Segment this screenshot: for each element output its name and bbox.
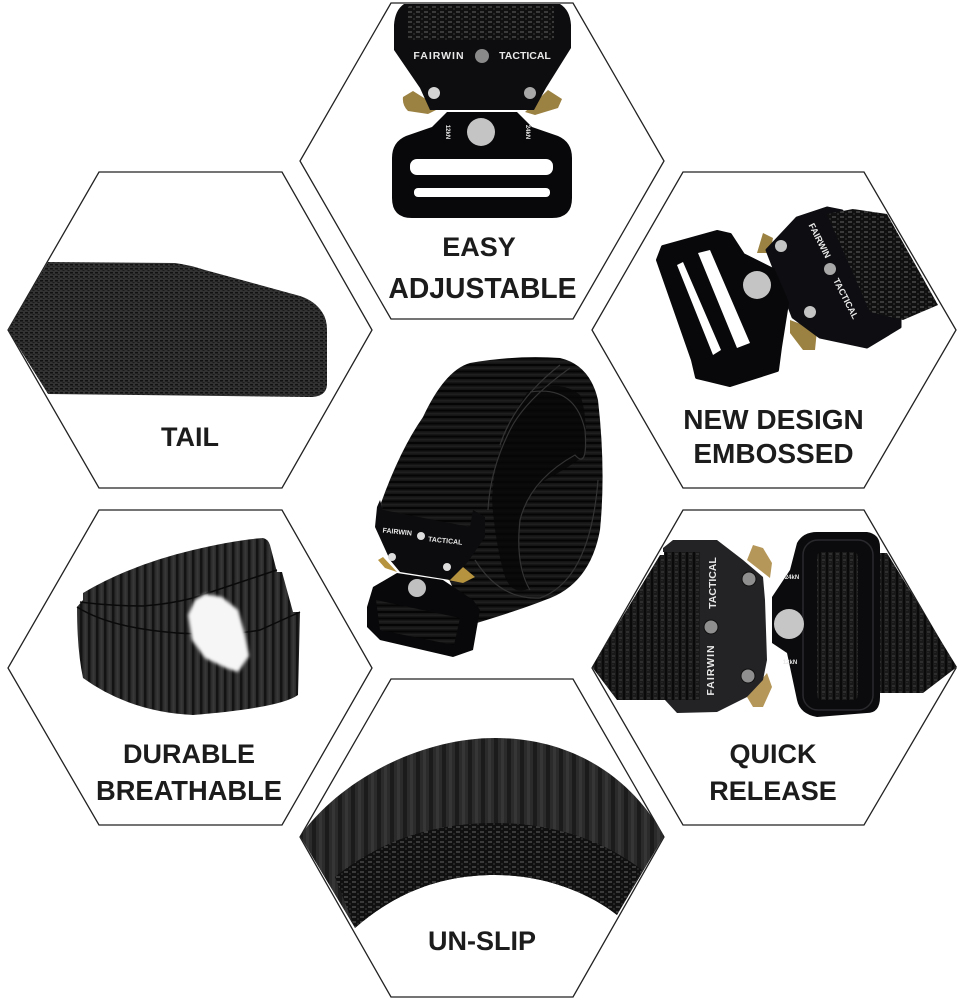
heading: un-slip: UN-SLIP	[428, 926, 536, 956]
icon: horizontal buckle: TACTICAL	[707, 557, 719, 609]
icon: center buckle: TACTICAL	[428, 536, 463, 547]
icon: belt tail	[8, 262, 327, 397]
center belt image	[367, 357, 603, 657]
icon: center buckle: FAIRWIN	[382, 527, 412, 538]
belt loop	[381, 357, 603, 625]
heading: durable breathable: DURABLE	[123, 739, 255, 769]
icon: horizontal buckle: 12kN	[783, 660, 797, 666]
heading: new design embossed: NEW DESIGN	[683, 404, 864, 435]
heading: easy adjustable: EASY	[442, 232, 516, 262]
panel: quick release	[592, 510, 957, 825]
icon: horizontal buckle	[592, 532, 957, 717]
panel: un-slip	[300, 679, 664, 997]
panel: easy adjustable	[300, 3, 664, 319]
panel: durable breathable: BREATHABLE	[96, 775, 282, 806]
panel: tail	[8, 172, 372, 488]
icon: top buckle: 24kN	[524, 125, 530, 139]
icon: top buckle: TACTICAL	[499, 50, 551, 62]
icon: rolled belt with feather	[77, 538, 300, 715]
icon: horizontal buckle: FAIRWIN	[705, 644, 717, 696]
icon: white feather	[188, 594, 249, 672]
icon: angled buckle: FAIRWIN	[807, 222, 833, 260]
icon: top buckle	[392, 4, 572, 218]
icon: horizontal buckle: 24kN	[785, 575, 799, 581]
icon: center buckle	[367, 500, 485, 657]
panel: quick release: RELEASE	[709, 776, 837, 806]
icon: angled buckle	[658, 208, 938, 385]
panel: durable breathable	[8, 510, 372, 825]
panel: easy adjustable: ADJUSTABLE	[388, 272, 577, 304]
icon: top buckle: 12kN	[444, 125, 450, 139]
panel: new design embossed	[592, 172, 956, 488]
icon: curved webbing	[300, 738, 664, 928]
icon: angled buckle: TACTICAL	[831, 277, 860, 321]
panel: new design embossed: EMBOSSED	[693, 438, 854, 469]
heading: tail: TAIL	[161, 422, 219, 452]
heading: quick release: QUICK	[730, 739, 817, 769]
icon: top buckle: FAIRWIN	[413, 50, 465, 62]
